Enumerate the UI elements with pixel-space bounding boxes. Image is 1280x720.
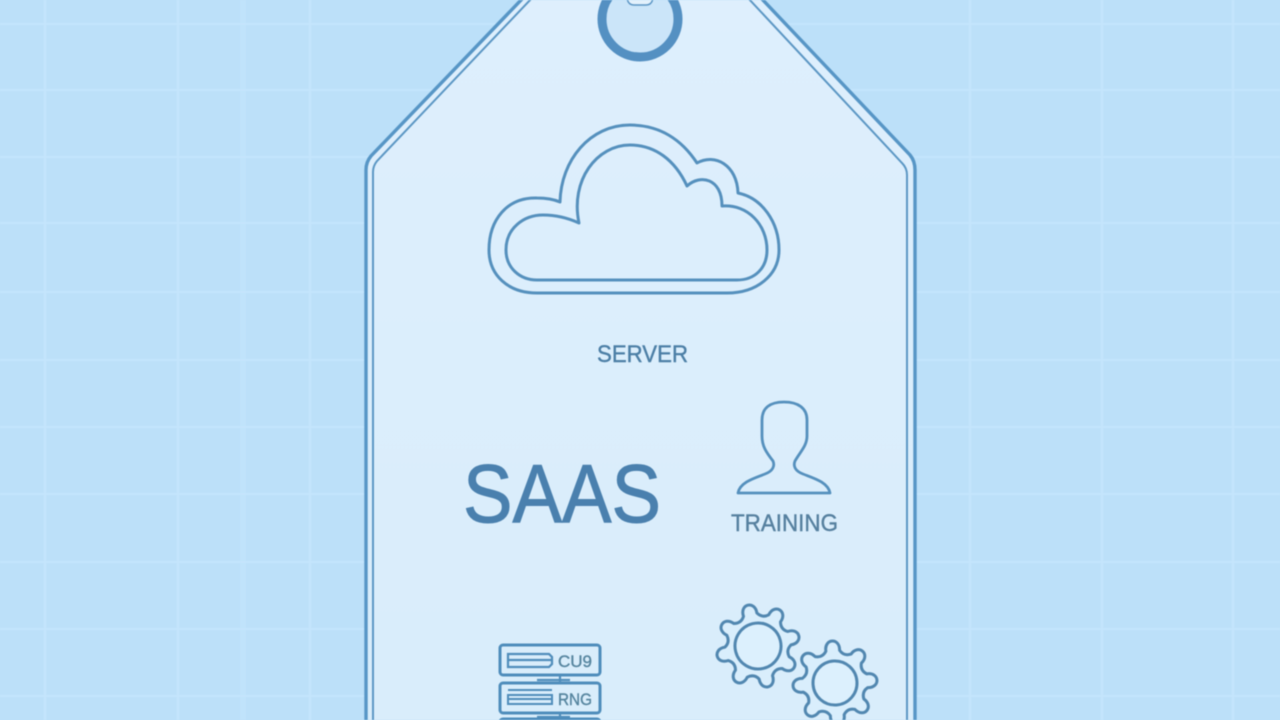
gear: upper left [707, 595, 809, 697]
icon: server stack [500, 645, 600, 720]
server unit: CU9: CU9 [558, 652, 592, 671]
icon: gears [707, 595, 880, 720]
label: TRAINING: TRAINING [731, 510, 838, 537]
heading: SAAS: SAAS [463, 447, 661, 540]
icon: tag eyelet ring [602, 0, 678, 57]
icon: cloud [489, 125, 779, 293]
panel: price tag body [366, 0, 915, 720]
label: SERVER: SERVER [597, 341, 688, 368]
server unit: RNG: RNG [558, 690, 592, 709]
icon: person [738, 402, 830, 493]
gear: lower right [790, 638, 880, 720]
